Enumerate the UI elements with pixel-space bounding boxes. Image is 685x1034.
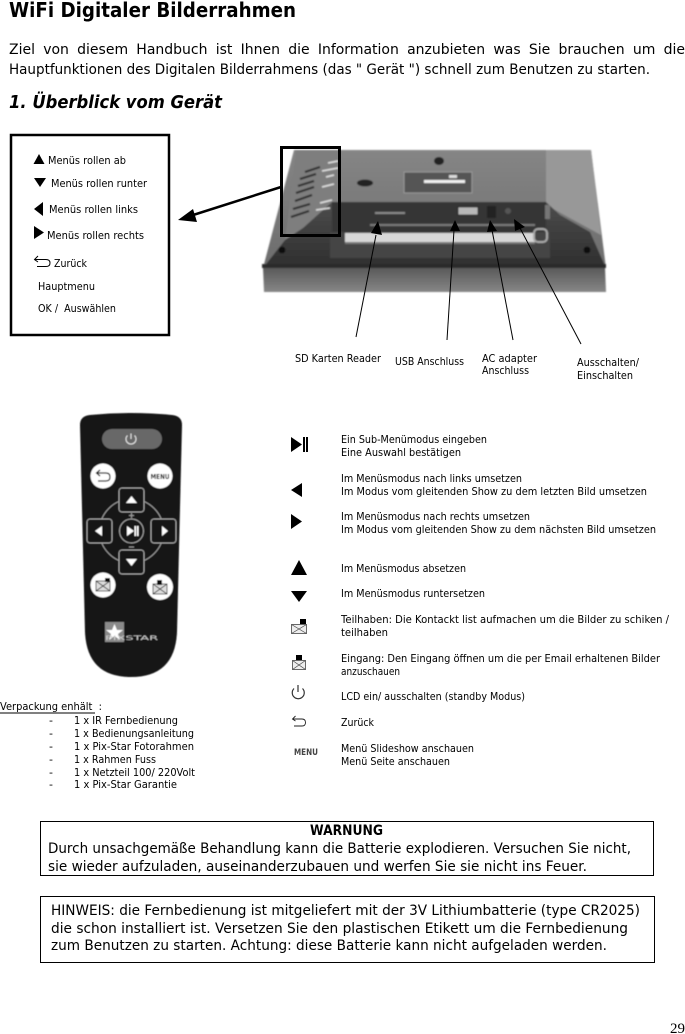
ports [375, 212, 405, 214]
label: USB: USB Anschluss [395, 355, 464, 368]
button legend: right [291, 510, 656, 536]
button legend: up [291, 560, 466, 575]
arrow: AC adapter [487, 220, 513, 340]
legend text: back: Zurück [54, 257, 88, 270]
inbox button [147, 574, 173, 600]
label: AC adapter [482, 352, 537, 377]
remote control [80, 413, 182, 677]
label: power: Einschalten [577, 369, 633, 382]
package contents: 1 x Pix-Star Garantie [74, 778, 177, 791]
icon: right triangle [34, 226, 44, 239]
arrow: power switch [514, 219, 581, 344]
button legend: menu [294, 742, 474, 768]
antenna bar [345, 233, 535, 242]
warning box: sie wieder aufzuladen, auseinanderzubauen und werfen Sie sie nicht ins Feuer. [48, 859, 587, 875]
back button [90, 464, 116, 488]
logo [105, 622, 158, 642]
package contents: 1 x Pix-Star Fotorahmen [74, 740, 194, 753]
share button [90, 572, 116, 598]
button legend: menu: Menü Seite anschauen [341, 755, 450, 768]
note box: zum Benutzen zu starten. Achtung: diese Batterie kann nicht aufgeladen werden. [51, 938, 607, 954]
intro line 1: Ziel von diesem Handbuch ist Ihnen die Information anzubieten was Sie brauchen um die [9, 42, 685, 58]
package contents: - [49, 778, 53, 791]
button legend: power: LCD ein/ ausschalten (standby Modus) [341, 690, 525, 703]
button legend: play pause: Eine Auswahl bestätigen [341, 446, 461, 459]
package contents: 1 x Netzteil 100/ 220Volt [74, 766, 196, 779]
icon: left triangle [34, 202, 43, 216]
label: SD: SD Karten Reader [295, 352, 381, 365]
note box: die schon installiert ist. Versetzen Sie den plastischen Etikett um die Fernbedienung [51, 921, 628, 937]
button legend: power [292, 685, 525, 703]
rating label [404, 172, 472, 193]
legend text: up: Menüs rollen ab [48, 154, 126, 167]
mounting holes [357, 180, 373, 186]
package contents: 1 x IR Fernbedienung [74, 714, 178, 727]
button legend: right: Im Menüsmodus nach rechts umsetzen [341, 510, 530, 523]
menu button: MENU [150, 473, 170, 481]
arrow: SD reader [356, 221, 382, 337]
legend text: ok: OK / Auswählen [38, 302, 116, 315]
button legend: back: Zurück [341, 716, 375, 729]
package contents: - [49, 740, 53, 753]
label: power [577, 356, 639, 382]
icon: back arrow [34, 256, 50, 266]
package contents: - [49, 714, 53, 727]
legend text: main menu: Hauptmenu [38, 280, 95, 293]
package contents [0, 700, 196, 791]
button legend: menu: Menü Slideshow anschauen [341, 742, 474, 755]
photo: back of picture frame [262, 148, 606, 292]
label: power: Ausschalten/ [577, 356, 639, 369]
warning box: Durch unsachgemäße Behandlung kann die Batterie explodieren. Versuchen Sie nicht, [48, 841, 631, 857]
warning box [40, 822, 654, 876]
label: AC adapter: Anschluss [482, 364, 529, 377]
label: AC adapter: AC adapter [482, 352, 537, 365]
warning box: WARNUNG [310, 823, 383, 839]
button legend: play pause [291, 433, 487, 459]
button legend: inbox [292, 652, 660, 678]
button legend: play pause: Ein Sub-Menümodus eingeben [341, 433, 487, 446]
button legend: down [291, 587, 485, 602]
button legend: inbox: anzuschauen [341, 665, 400, 678]
package contents: Verpackung enhält : [0, 700, 102, 713]
legend text: down: Menüs rollen runter [51, 177, 147, 190]
button legend: share: teilhaben [341, 626, 388, 639]
vents [291, 167, 320, 217]
package contents: 1 x Bedienungsanleitung [74, 727, 194, 740]
package contents: - [49, 766, 53, 779]
package contents: - [49, 727, 53, 740]
button legend: left [291, 472, 647, 498]
package contents: 1 x Rahmen Fuss [74, 753, 156, 766]
button legend: menu: MENU [294, 748, 318, 758]
note box [40, 896, 654, 962]
arrow: USB [447, 220, 460, 340]
button legend: up: Im Menüsmodus absetzen [341, 562, 466, 575]
icon: up triangle [34, 154, 44, 164]
legend text: left: Menüs rollen links [49, 203, 138, 216]
legend text: right: Menüs rollen rechts [47, 229, 144, 242]
d-pad [87, 488, 176, 574]
button legend: back [292, 716, 375, 729]
panel: menu legend box [11, 135, 169, 335]
power button [102, 429, 162, 449]
intro line 2: Hauptfunktionen des Digitalen Bilderrahmens (das " Gerät ") schnell zum Benutzen zu starten. [9, 62, 650, 78]
menu button [148, 464, 172, 488]
button legend: down: Im Menüsmodus runtersetzen [341, 587, 485, 600]
button legend: left: Im Modus vom gleitenden Show zu dem letzten Bild umsetzen [341, 485, 647, 498]
highlight rectangle [282, 148, 340, 236]
arrow: highlight to legend [178, 187, 281, 222]
button legend: share [292, 613, 669, 639]
logo: PIXSTAR [105, 635, 158, 642]
package contents: - [49, 753, 53, 766]
section heading: 1. Überblick vom Gerät [9, 91, 223, 113]
button legend: left: Im Menüsmodus nach links umsetzen [341, 472, 522, 485]
note box: HINWEIS: die Fernbedienung ist mitgeliefert mit der 3V Lithiumbatterie (type CR2025) [51, 903, 640, 919]
icon: down triangle [34, 178, 46, 187]
